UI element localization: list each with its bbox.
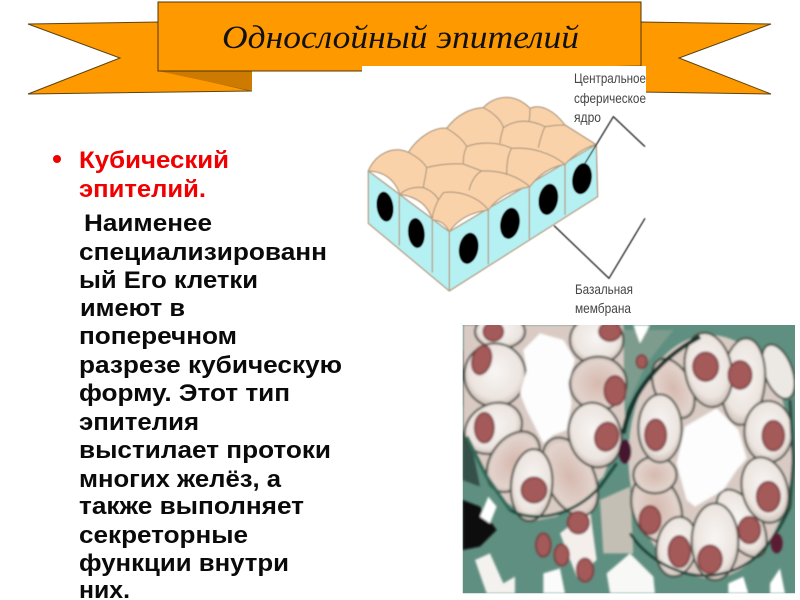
label: central nucleus: ядро	[574, 109, 601, 125]
description text: также выполняет	[79, 493, 304, 520]
nuclei	[375, 162, 594, 265]
body text block	[53, 147, 342, 600]
ribbon right tail	[640, 22, 771, 94]
lumens	[520, 333, 575, 443]
tissue background	[463, 325, 795, 593]
diagram: cuboidal epithelium	[362, 66, 646, 324]
cell block drawing	[368, 97, 645, 291]
cell side faces	[368, 144, 598, 291]
pointer lines	[554, 117, 645, 278]
title ribbon	[28, 2, 771, 94]
red heading: эпителий.	[79, 176, 206, 203]
left gland cells	[455, 315, 629, 525]
cell borders	[399, 164, 565, 291]
description text: Наименее	[84, 210, 212, 237]
description text: ый Его клетки	[79, 267, 258, 294]
label: central nucleus: Центральное	[574, 70, 646, 86]
label: basal membrane	[575, 281, 633, 316]
description text	[79, 210, 342, 600]
dark membranes	[623, 337, 700, 433]
label: basal membrane: мембрана	[575, 300, 631, 316]
pale interstitial tissue	[600, 487, 633, 553]
dark patches	[463, 500, 497, 550]
description text: многих желёз, а	[79, 466, 282, 493]
label: central nucleus	[574, 70, 646, 125]
micrograph of glandular cuboidal epithelium	[455, 315, 800, 593]
description text: разрезе кубическую	[79, 352, 342, 379]
nuclei	[469, 322, 784, 582]
red heading	[79, 147, 229, 203]
description text: специализированн	[79, 239, 327, 266]
description text: поперечном	[79, 323, 237, 350]
description text: эпителия	[79, 409, 199, 436]
ribbon left tail	[28, 22, 252, 94]
white spaces	[480, 497, 497, 523]
bullet	[53, 155, 61, 163]
description text: имеют в	[80, 295, 185, 322]
ribbon left fold	[158, 70, 252, 91]
description text: секреторные	[79, 522, 248, 549]
cell top surface	[368, 97, 596, 232]
description text: функции внутри	[79, 550, 289, 577]
red heading: Кубический	[79, 147, 229, 174]
right gland cells	[622, 329, 800, 580]
diagram white backing	[362, 66, 646, 324]
title text: Однослойный эпителий	[222, 20, 580, 56]
description text: форму. Этот тип	[79, 380, 290, 407]
ribbon main band	[158, 2, 641, 71]
description text: выстилает протоки	[79, 437, 331, 464]
label: basal membrane: Базальная	[575, 281, 633, 297]
label: central nucleus: сферическое	[574, 90, 646, 106]
